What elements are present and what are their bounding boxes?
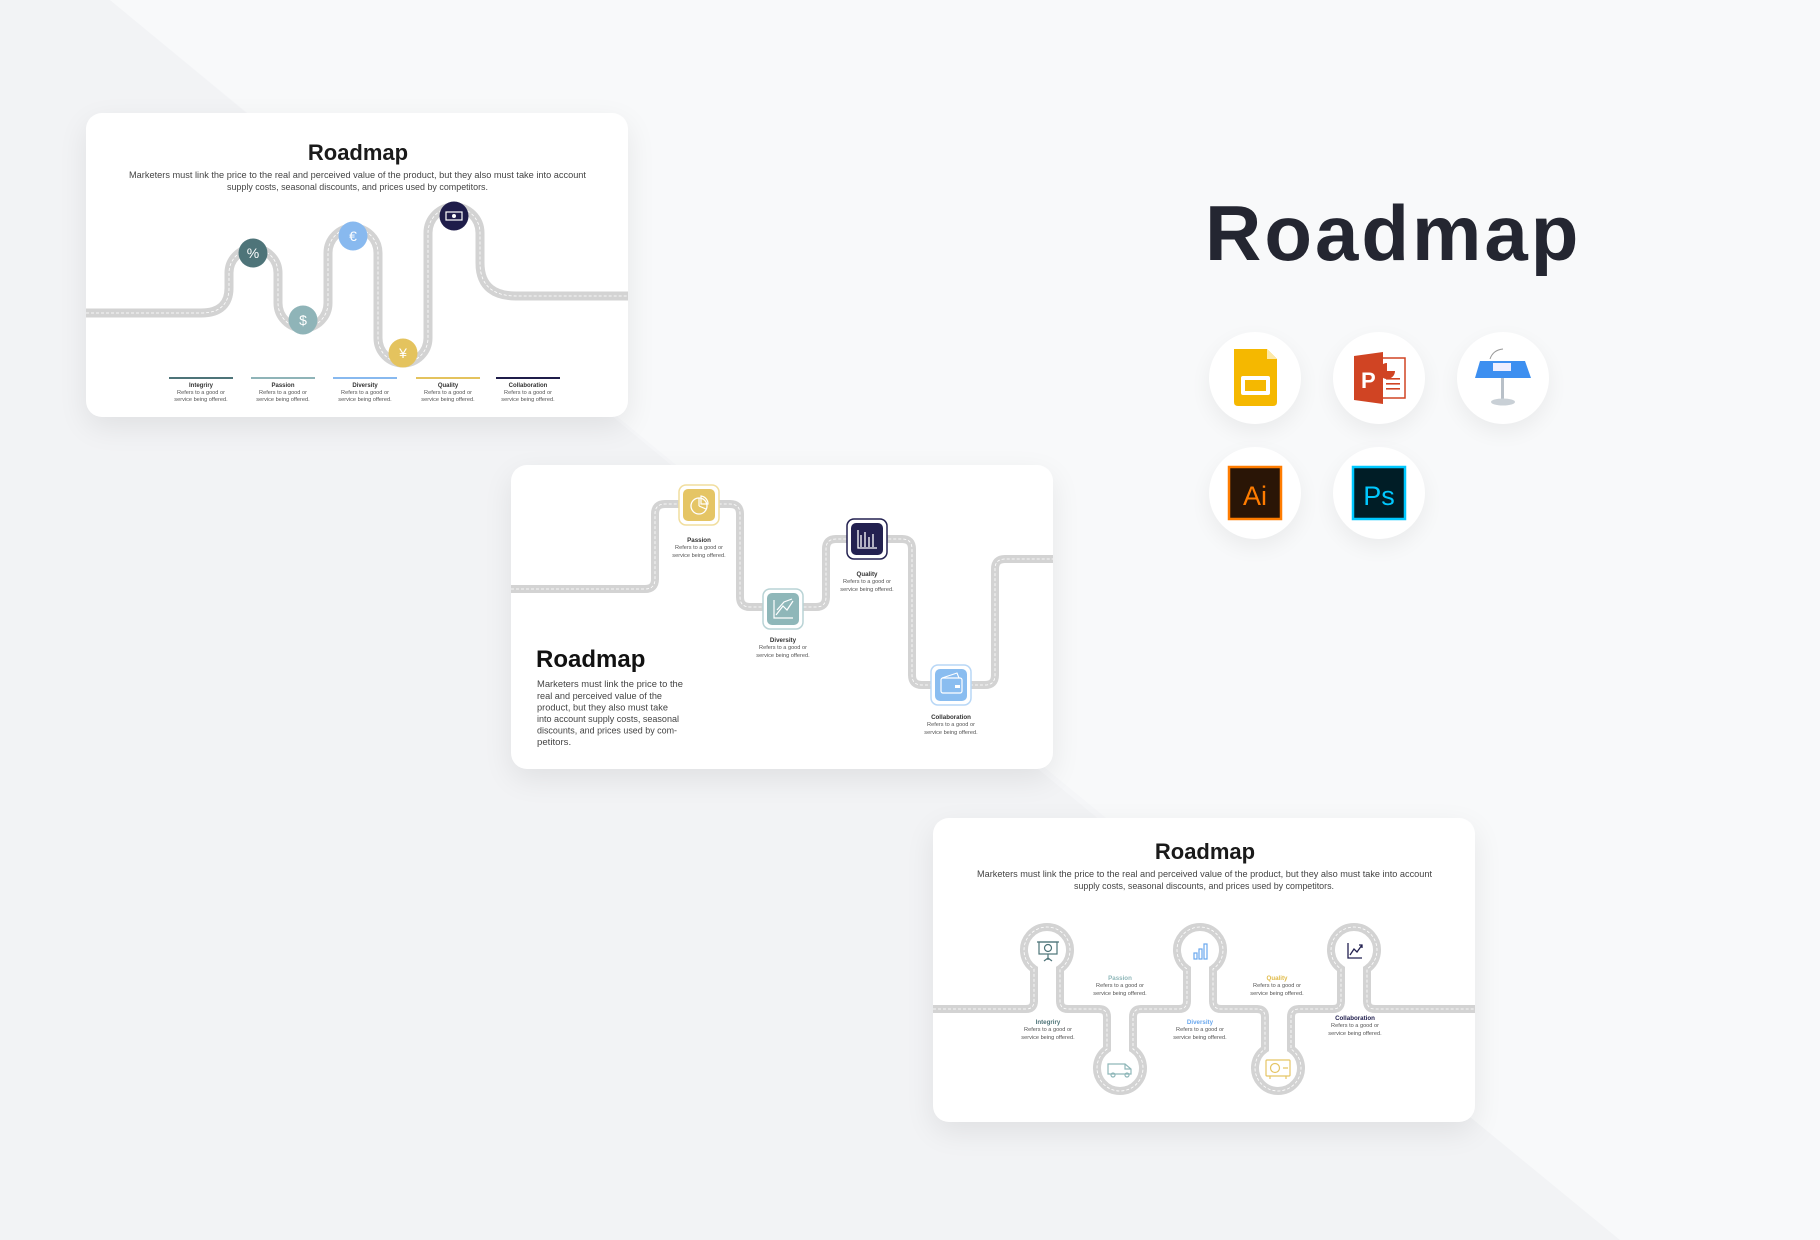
icon: yen: ¥ [398, 345, 407, 361]
legend: service being offered. [501, 397, 555, 403]
icon: safe [1266, 1060, 1290, 1079]
icon: line chart [1348, 943, 1362, 958]
icon: photoshop [1333, 447, 1425, 539]
labels: Refers to a good or [1331, 1023, 1379, 1029]
icon: illustrator: Ai [1243, 481, 1267, 511]
labels: Refers to a good or [1096, 983, 1144, 989]
icon: money [440, 202, 468, 230]
labels: Refers to a good or [675, 545, 723, 551]
labels: service being offered. [672, 553, 726, 559]
road [511, 504, 1053, 685]
icon: powerpoint [1333, 332, 1425, 424]
road [86, 207, 628, 363]
icon: photoshop: Ps [1363, 481, 1395, 511]
icon: bar chart square [847, 519, 887, 559]
labels [672, 537, 978, 736]
legend: Refers to a good or [341, 390, 389, 396]
heading: Roadmap [536, 646, 645, 673]
legend [169, 377, 560, 403]
labels: Refers to a good or [1024, 1027, 1072, 1033]
legend: service being offered. [338, 397, 392, 403]
text block: subtitle [129, 170, 586, 192]
icon: dollar [288, 306, 318, 334]
labels: Refers to a good or [1253, 983, 1301, 989]
icon: pie chart square [679, 485, 719, 525]
legend: service being offered. [256, 397, 310, 403]
heading: Roadmap [308, 140, 408, 165]
icon: percent [238, 238, 268, 268]
icon: van [1108, 1064, 1131, 1077]
icon: bar chart [1194, 944, 1207, 959]
icon: keynote [1457, 332, 1549, 424]
labels: service being offered. [1021, 1035, 1075, 1041]
legend: Passion [271, 383, 295, 389]
text block: paragraph: discounts, and prices used by com- [537, 726, 677, 736]
text block: paragraph [537, 679, 683, 748]
labels: service being offered. [840, 587, 894, 593]
legend: service being offered. [174, 397, 228, 403]
heading: Roadmap [1155, 839, 1255, 864]
icon: presentation board [1037, 942, 1059, 961]
panel: card 1 wave roadmap [86, 113, 628, 417]
labels: Refers to a good or [843, 579, 891, 585]
legend: Integriry [189, 383, 214, 389]
panel: card 3 loop roadmap [933, 818, 1475, 1122]
labels: service being offered. [1250, 991, 1304, 997]
icon: yen [388, 338, 418, 368]
labels: Passion [687, 537, 711, 544]
labels: Collaboration [931, 714, 971, 721]
icon: illustrator [1209, 447, 1301, 539]
text block: subtitle [977, 869, 1432, 891]
labels [1021, 975, 1382, 1041]
text block: paragraph: Marketers must link the price to the [537, 679, 683, 690]
text block: subtitle: supply costs, seasonal discounts, and prices used by competitors. [1074, 881, 1334, 891]
labels: Integriry [1036, 1019, 1061, 1026]
labels: Passion [1108, 975, 1132, 982]
labels: service being offered. [756, 653, 810, 659]
legend: Refers to a good or [259, 390, 307, 396]
labels: service being offered. [924, 730, 978, 736]
legend: Quality [438, 383, 459, 389]
icon: percent: % [247, 245, 259, 261]
labels: Refers to a good or [759, 645, 807, 651]
panel: card 2 step roadmap [511, 465, 1053, 769]
text block: paragraph: petitors. [537, 737, 571, 748]
text block: subtitle: supply costs, seasonal discounts, and prices used by competitors. [227, 182, 488, 192]
text block: paragraph: product, but they also must take [537, 702, 668, 714]
legend: Diversity [352, 383, 378, 389]
legend: Collaboration [509, 383, 548, 389]
legend: service being offered. [421, 397, 475, 403]
labels: Quality [1267, 975, 1288, 982]
legend: Refers to a good or [177, 390, 225, 396]
icon: wallet square [931, 665, 971, 705]
labels: Quality [857, 571, 878, 578]
labels: Refers to a good or [1176, 1027, 1224, 1033]
labels: Refers to a good or [927, 722, 975, 728]
text block: paragraph: into account supply costs, seasonal [537, 714, 679, 725]
labels: service being offered. [1328, 1031, 1382, 1037]
text block: paragraph: real and perceived value of the [537, 691, 662, 702]
labels: service being offered. [1093, 991, 1147, 997]
icon: euro: € [349, 228, 357, 244]
main title: Roadmap [1205, 189, 1581, 277]
legend: Refers to a good or [504, 390, 552, 396]
legend: Refers to a good or [424, 390, 472, 396]
text block: subtitle: Marketers must link the price to the real and perceived value of the product, but they also must take into account [129, 170, 586, 180]
road [933, 927, 1475, 1091]
labels: Collaboration [1335, 1015, 1375, 1022]
labels: Diversity [1187, 1019, 1214, 1026]
labels: Diversity [770, 637, 797, 644]
labels: service being offered. [1173, 1035, 1227, 1041]
icon: dollar: $ [299, 312, 307, 328]
text block: subtitle: Marketers must link the price to the real and perceived value of the product, but they also must take into account [977, 869, 1432, 879]
icon: powerpoint: P [1361, 368, 1376, 393]
icon: google slides [1209, 332, 1301, 424]
icon: growth chart square [763, 589, 803, 629]
icon: euro [338, 222, 368, 250]
